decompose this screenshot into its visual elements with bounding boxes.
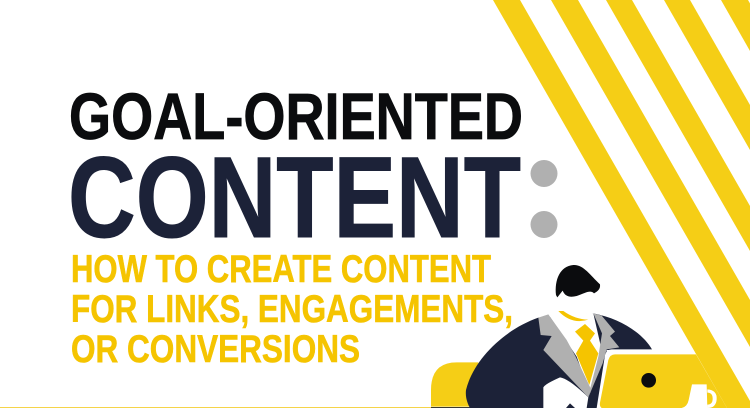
laptop and mug bbox=[600, 354, 727, 408]
arm bbox=[543, 377, 588, 408]
laptop dot bbox=[641, 373, 656, 388]
right lapel bbox=[588, 313, 619, 397]
tie bbox=[575, 324, 598, 385]
floor line bbox=[0, 407, 471, 408]
suit jacket bbox=[466, 313, 652, 408]
title: goal-oriented: GOAL-ORIENTED bbox=[69, 79, 523, 153]
laptop body bbox=[600, 354, 727, 408]
coffee mug bbox=[682, 384, 717, 408]
laptop outline bbox=[597, 349, 703, 408]
left lapel bbox=[538, 314, 591, 397]
hair bbox=[556, 265, 600, 297]
lower diagonal yellow stripe bbox=[493, 0, 750, 408]
subtitle: HOW TO CREATE CONTENT bbox=[71, 248, 491, 291]
subtitle: OR CONVERSIONS bbox=[71, 328, 360, 371]
upper diagonal yellow stripes bbox=[551, 0, 750, 347]
hand detail bbox=[566, 403, 575, 408]
subtitle: FOR LINKS, ENGAGEMENTS, bbox=[71, 288, 513, 331]
chair bbox=[431, 362, 478, 407]
colon dots bbox=[530, 160, 558, 238]
shirt bbox=[548, 313, 602, 393]
subtitle bbox=[71, 248, 513, 371]
collar chin line bbox=[558, 311, 588, 321]
title: content: CONTENT bbox=[68, 134, 521, 262]
illustration: businessman bbox=[431, 265, 703, 408]
